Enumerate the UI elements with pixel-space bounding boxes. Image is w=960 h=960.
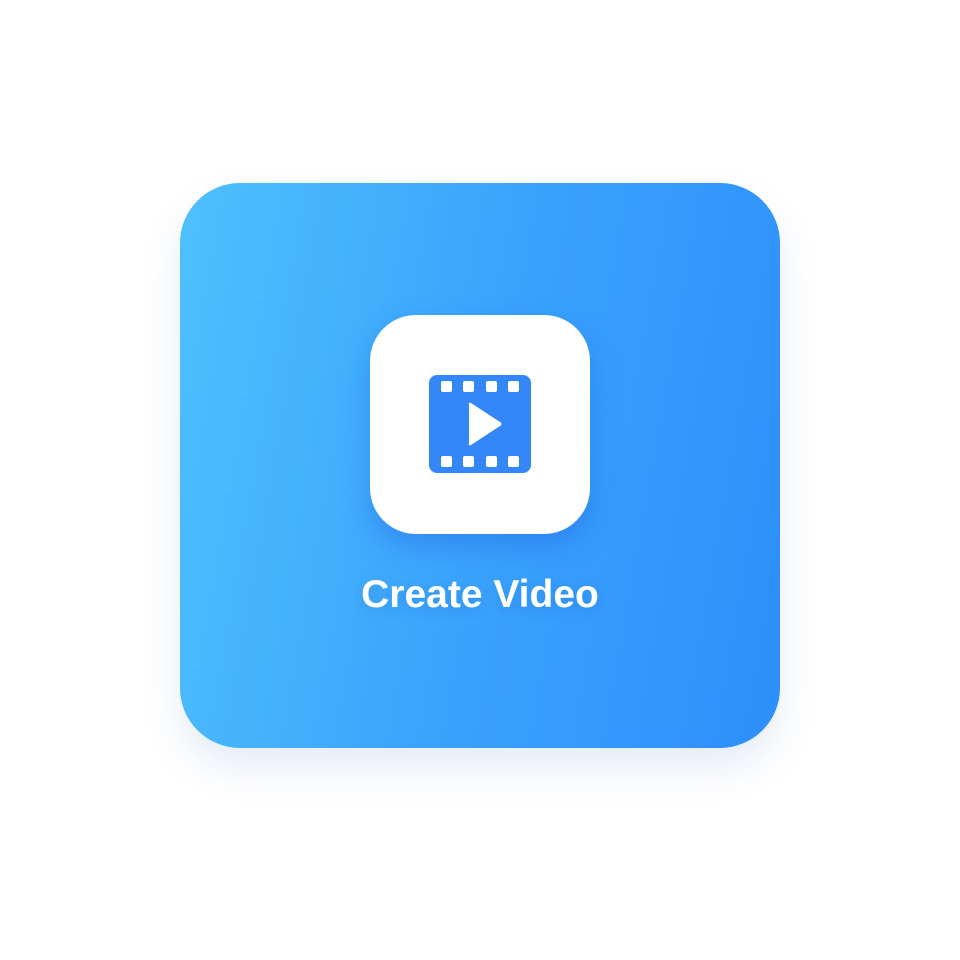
heading: Create Video: Create Video xyxy=(361,573,599,616)
icon: film strip with play xyxy=(429,375,531,473)
panel: create video card xyxy=(180,183,780,748)
icon tile xyxy=(370,315,590,534)
